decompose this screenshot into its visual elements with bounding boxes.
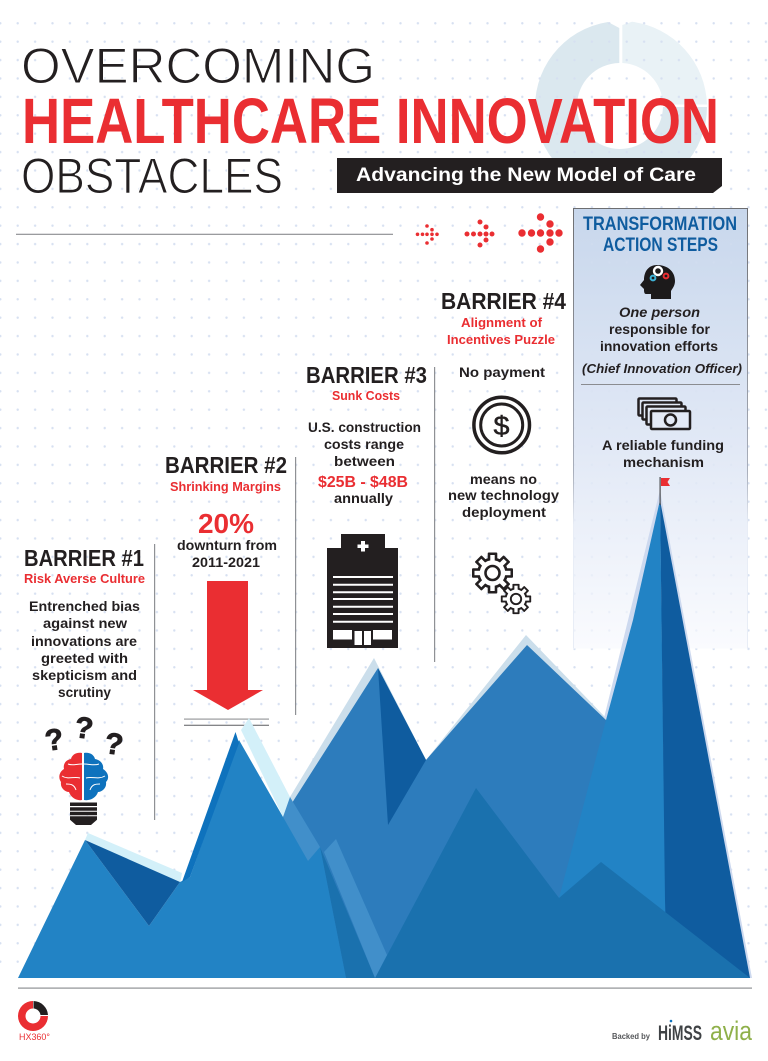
- icon: brain light bulb with question marks: [43, 711, 125, 825]
- barrier 3: $25B - $48B: [318, 474, 408, 491]
- barrier 3: between: [334, 453, 395, 469]
- icon: growing dotted arrows: [416, 213, 563, 253]
- barrier 3: costs range: [324, 436, 404, 452]
- barrier 2: Shrinking Margins: [170, 479, 281, 494]
- text: one person responsible: One person: [619, 304, 700, 320]
- barrier 1: Risk Averse Culture: [24, 571, 145, 586]
- barrier 1: against new: [43, 615, 127, 631]
- logo: HX360: HX360°: [19, 1032, 50, 1043]
- barrier 2: downturn from: [177, 537, 277, 553]
- title: [21, 38, 719, 204]
- icon: brain light bulb with question marks: ?: [73, 711, 95, 746]
- icon: gears: [472, 552, 531, 614]
- barrier 1: greeted with: [41, 650, 128, 666]
- barrier 4: [441, 288, 566, 520]
- chart: mountain range: [18, 490, 752, 978]
- mountain: back peaks: [283, 635, 640, 978]
- barrier 1: BARRIER #1: [24, 545, 144, 571]
- icon: dollar coin: [474, 397, 530, 453]
- icon: stack of money: [638, 398, 690, 429]
- barrier 2: 2011-2021: [192, 554, 260, 570]
- panel heading: [583, 214, 737, 256]
- barrier 1: [24, 545, 145, 700]
- barrier 4: new technology: [448, 487, 559, 503]
- icon: summit flag: [660, 477, 670, 505]
- text: one person responsible: (Chief Innovation Officer): [582, 361, 742, 376]
- logo: HX360: [18, 1001, 50, 1043]
- title: OBSTACLES: [21, 148, 283, 204]
- sponsors: backed by HIMSS and AVIA: [612, 1016, 753, 1046]
- barrier 1: Entrenched bias: [29, 598, 140, 614]
- barrier 3: U.S. construction: [308, 419, 421, 435]
- text: reliable funding: mechanism: [623, 454, 704, 470]
- icon: brain light bulb with question marks: ?: [43, 723, 66, 758]
- barrier 3: [306, 362, 427, 506]
- icon: hospital building: [327, 534, 398, 648]
- mountain: front right ridge: [320, 788, 750, 978]
- icon: head with gears: [640, 265, 675, 299]
- barrier 1: skepticism and: [32, 667, 137, 683]
- barrier 4: deployment: [462, 504, 546, 520]
- subtitle banner: Advancing the New Model of Care: [356, 164, 696, 186]
- barrier 4: No payment: [459, 364, 545, 380]
- icon: dollar coin: $: [494, 411, 510, 441]
- sponsors: backed by HIMSS and AVIA: avia: [710, 1016, 753, 1046]
- background donut watermark: [535, 22, 707, 193]
- text: one person responsible: [582, 304, 742, 376]
- title: OVERCOMING: [21, 38, 375, 94]
- barrier 4: BARRIER #4: [441, 288, 566, 314]
- barrier 2: [165, 452, 287, 570]
- subtitle banner: [337, 158, 722, 193]
- mountain: tallest summit: [559, 490, 752, 978]
- panel heading: TRANSFORMATION: [583, 214, 737, 235]
- arrow: red downturn arrow: [184, 581, 269, 726]
- barrier 1: scrutiny: [58, 684, 111, 700]
- barrier 3: Sunk Costs: [332, 388, 400, 403]
- text: reliable funding: A reliable funding: [602, 437, 724, 453]
- text: one person responsible: responsible for: [609, 321, 711, 337]
- sponsors: backed by HIMSS and AVIA: Backed by: [612, 1032, 651, 1041]
- barrier 3: annually: [334, 490, 393, 506]
- panel: transformation action steps: [574, 208, 748, 648]
- text: one person responsible: innovation efforts: [600, 338, 718, 354]
- icon: brain light bulb with question marks: ?: [103, 727, 125, 762]
- barrier 4: Alignment of: [461, 315, 543, 330]
- sponsors: backed by HIMSS and AVIA: HiMSS: [658, 1022, 702, 1045]
- barrier 4: means no: [470, 471, 537, 487]
- mountain: left peaks: [18, 718, 387, 978]
- barrier 3: BARRIER #3: [306, 362, 427, 388]
- barrier 1: innovations are: [31, 633, 137, 649]
- barrier 2: 20%: [198, 508, 254, 539]
- panel heading: ACTION STEPS: [603, 235, 718, 256]
- barrier 4: Incentives Puzzle: [447, 332, 555, 347]
- text: reliable funding: [602, 437, 724, 470]
- barrier 2: BARRIER #2: [165, 452, 287, 478]
